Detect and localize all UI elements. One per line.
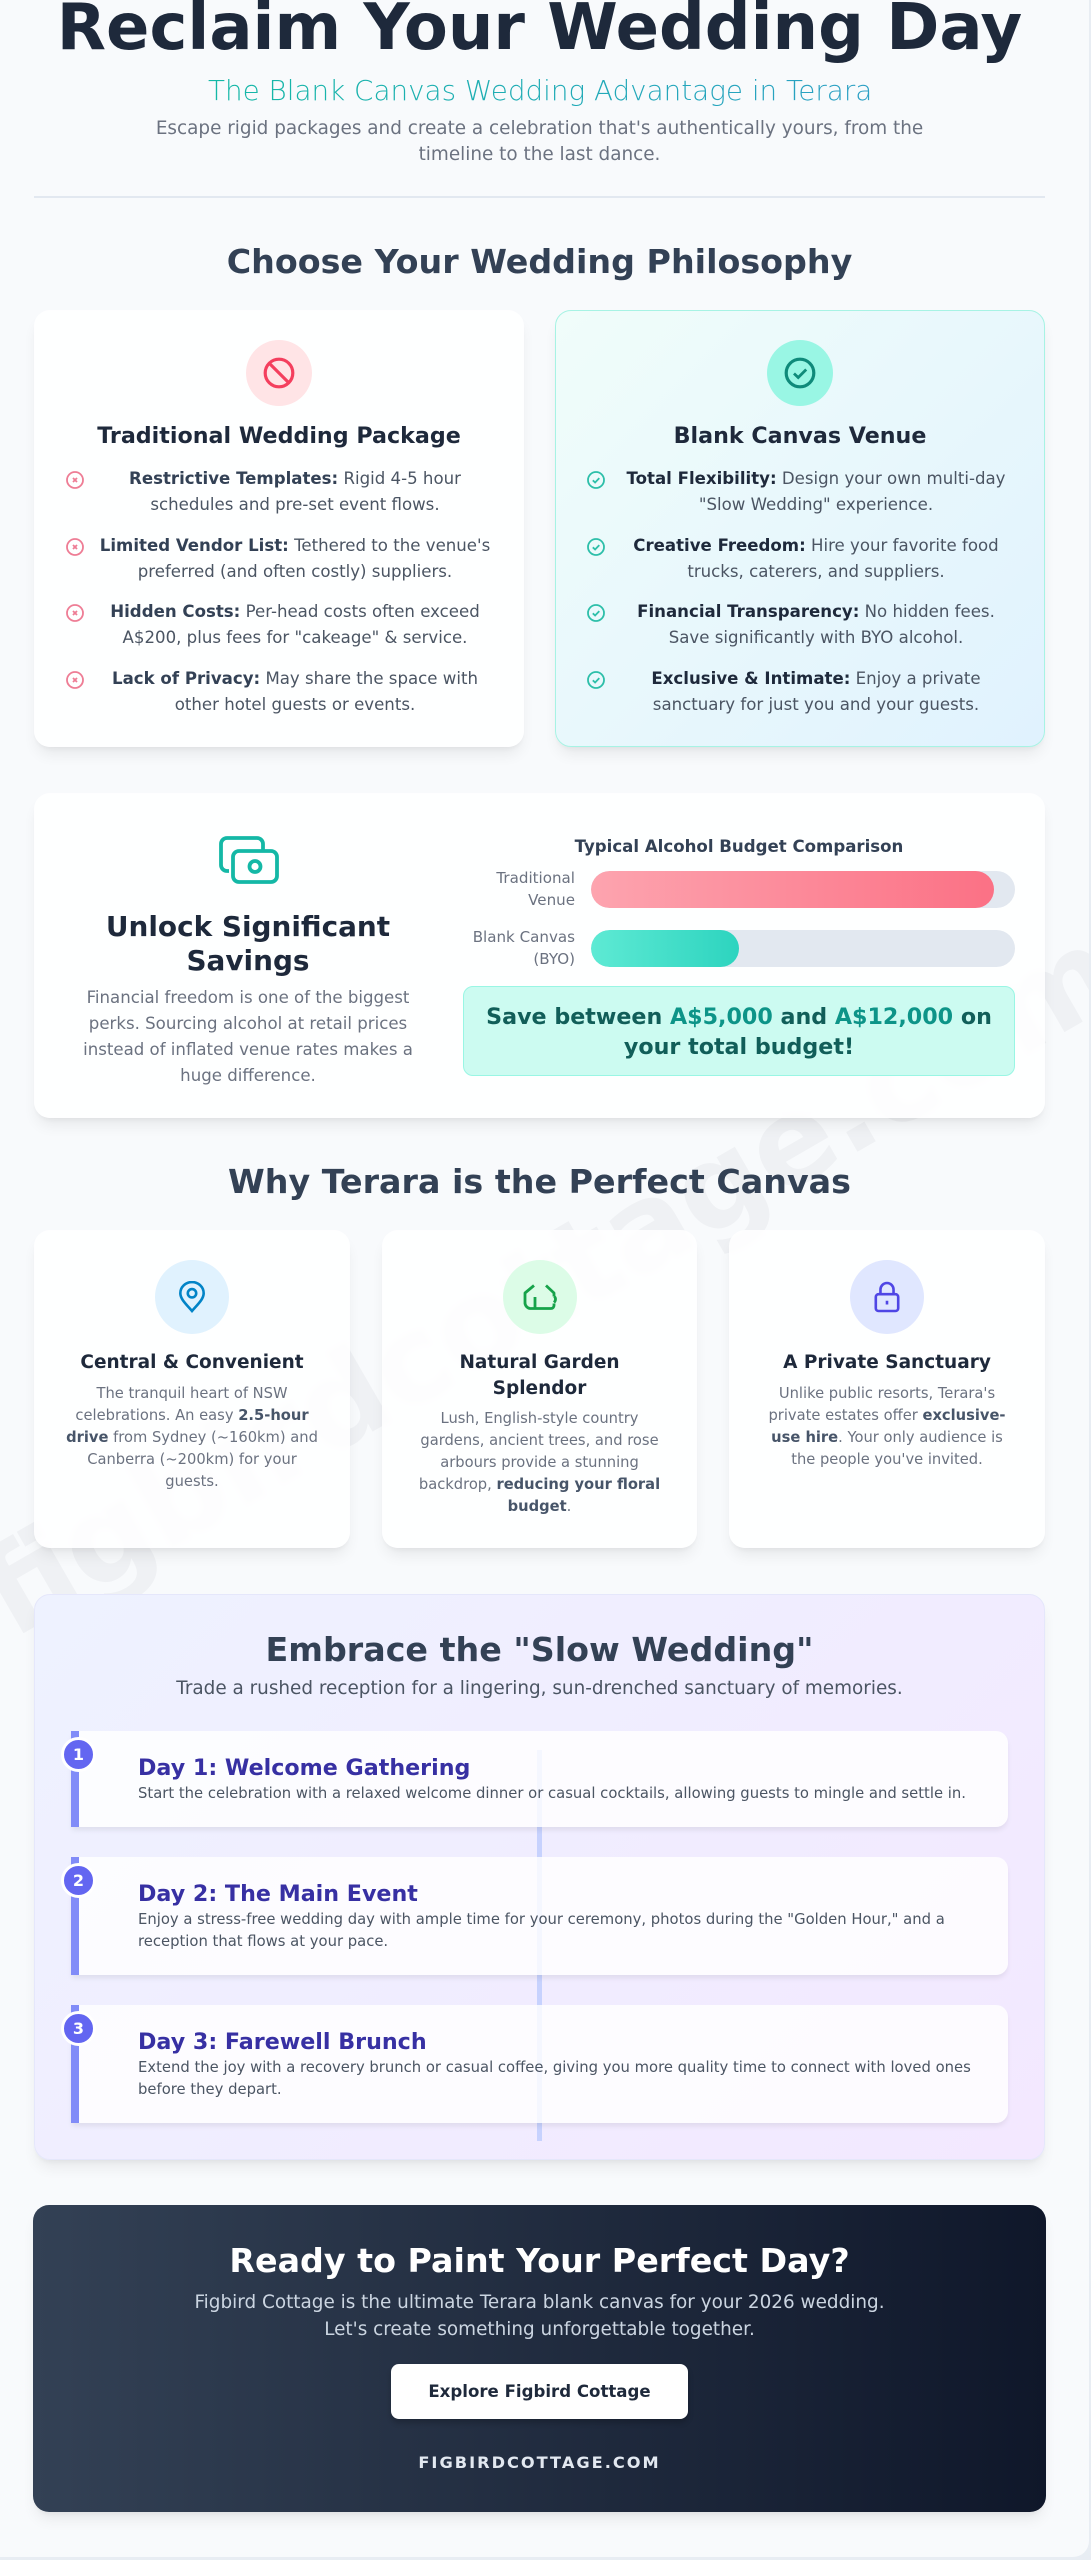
panel: call to action (33, 2205, 1046, 2512)
panel: central and convenient (34, 1230, 350, 1548)
cta heading: Ready to Paint Your Perfect Day? (229, 2241, 850, 2280)
intro text: Escape rigid packages and create a celebration that's authentically yours, from the (156, 118, 923, 139)
day 3 text: Extend the joy with a recovery brunch or casual coffee, giving you more quality time to connect with loved ones (138, 2059, 971, 2076)
text: arbours provide a stunning (440, 1454, 639, 1471)
badge 2: 2 (73, 1871, 84, 1890)
button (391, 2364, 688, 2419)
heading (459, 1352, 620, 1399)
day 1 (71, 1731, 1008, 1827)
heading: why terara: Why Terara is the Perfect Canvas (228, 1162, 851, 1201)
panel: slow wedding (34, 1594, 1045, 2160)
day 1 title: Day 1: Welcome Gathering (138, 1755, 470, 1781)
savings text (83, 988, 413, 1085)
button: Explore Figbird Cottage (428, 2382, 651, 2401)
heading: savings (106, 910, 390, 977)
cta text: Figbird Cottage is the ultimate Terara blank canvas for your 2026 wedding. (194, 2292, 885, 2313)
badge 2 (61, 1863, 96, 1898)
day 3 text (138, 2059, 971, 2098)
badge 3 (61, 2011, 96, 2046)
item: financial transparency (587, 602, 995, 647)
item: limited vendor list: Limited Vendor List: Tethered to the venue's (100, 536, 490, 555)
text: use hire. Your only audience is (771, 1429, 1003, 1446)
icon: cash (219, 836, 279, 884)
item: restrictive templates: schedules and pre-set event flows. (150, 495, 440, 514)
day 3 (71, 2005, 1008, 2123)
heading: Splendor (493, 1378, 586, 1399)
icon: check circle (767, 340, 833, 406)
bar: traditional (591, 871, 1015, 908)
item: creative freedom: Creative Freedom: Hire your favorite food (633, 536, 999, 555)
slow wedding text: Trade a rushed reception for a lingering, sun-drenched sanctuary of memories. (176, 1678, 903, 1699)
chart label: traditional (496, 869, 575, 909)
item: hidden costs: Hidden Costs: Per-head costs often exceed (110, 602, 480, 621)
text: Unlike public resorts, Terara's (779, 1385, 995, 1402)
chart label: byo: (BYO) (533, 950, 575, 968)
chart label: traditional: Venue (528, 891, 575, 909)
text: Lush, English-style country (441, 1410, 638, 1427)
badge 3: 3 (73, 2019, 84, 2038)
text (768, 1385, 1006, 1468)
text: drive from Sydney (~160km) and (66, 1429, 318, 1446)
item: exclusive and intimate: Exclusive & Intimate: Enjoy a private (651, 669, 981, 688)
text (66, 1385, 318, 1490)
item: lack of privacy (66, 669, 478, 714)
item: financial transparency: Save significantly with BYO alcohol. (669, 628, 963, 647)
item: financial transparency: Financial Transparency: No hidden fees. (637, 602, 995, 621)
day 3 title: Day 3: Farewell Brunch (138, 2029, 427, 2055)
item: creative freedom (587, 536, 999, 581)
item: exclusive and intimate (587, 669, 981, 714)
item: total flexibility: Total Flexibility: Design your own multi-day (626, 469, 1005, 488)
heading: A Private Sanctuary (783, 1352, 991, 1373)
text: the people you've invited. (791, 1451, 983, 1468)
day 2 text (138, 1911, 945, 1950)
savings text: Financial freedom is one of the biggest (87, 988, 409, 1007)
text: budget. (508, 1498, 571, 1515)
website: FIGBIRDCOTTAGE.COM (418, 2453, 661, 2472)
panel: savings (34, 793, 1045, 1118)
item: restrictive templates: Restrictive Templates: Rigid 4-5 hour (129, 469, 461, 488)
item: restrictive templates (66, 469, 461, 514)
icon: map pin (155, 1260, 229, 1334)
callout: savings range: your total budget! (624, 1034, 854, 1060)
heading: savings: Unlock Significant (106, 910, 390, 943)
bar: byo (591, 930, 1015, 967)
text: Canberra (~200km) for your (87, 1451, 297, 1468)
panel: traditional package (34, 310, 524, 747)
item: creative freedom: trucks, caterers, and suppliers. (687, 562, 945, 581)
day 2 title: Day 2: The Main Event (138, 1881, 418, 1907)
text: guests. (165, 1473, 219, 1490)
panel: private sanctuary (729, 1230, 1045, 1548)
day 2 text: Enjoy a stress-free wedding day with ample time for your ceremony, photos during the "Golden Hour," and a (138, 1911, 945, 1928)
item: limited vendor list: preferred (and often costly) suppliers. (138, 562, 452, 581)
subtitle: The Blank Canvas Wedding Advantage in Terara (208, 74, 872, 107)
chart label: traditional: Traditional (496, 869, 575, 887)
day 3 text: before they depart. (138, 2081, 282, 2098)
item: limited vendor list (66, 536, 490, 581)
heading: Central & Convenient (80, 1352, 304, 1373)
chart label: byo (473, 928, 575, 968)
intro text: timeline to the last dance. (419, 144, 660, 165)
text: backdrop, reducing your floral (419, 1476, 660, 1493)
text: celebrations. An easy 2.5-hour (75, 1407, 309, 1424)
text (419, 1410, 660, 1515)
item: lack of privacy: Lack of Privacy: May share the space with (112, 669, 478, 688)
cta text (194, 2292, 885, 2340)
heading: philosophy: Choose Your Wedding Philosophy (227, 242, 852, 281)
callout: savings range (463, 986, 1015, 1076)
savings text: instead of inflated venue rates makes a (83, 1040, 413, 1059)
cta text: Let's create something unforgettable together. (324, 2318, 755, 2340)
item: hidden costs: A$200, plus fees for "cakeage" & service. (123, 628, 467, 647)
chart title: Typical Alcohol Budget Comparison (575, 837, 903, 856)
text: The tranquil heart of NSW (96, 1385, 288, 1402)
item: total flexibility: "Slow Wedding" experience. (699, 495, 933, 514)
heading: slow wedding: Embrace the "Slow Wedding" (266, 1630, 813, 1669)
text: gardens, ancient trees, and rose (420, 1432, 659, 1449)
icon: lock (850, 1260, 924, 1334)
callout: savings range: Save between A$5,000 and A$12,000 on (486, 1004, 992, 1030)
day 2 text: reception that flows at your pace. (138, 1933, 388, 1950)
day 2 (71, 1857, 1008, 1975)
intro text (156, 118, 923, 165)
heading: traditional: Traditional Wedding Package (97, 423, 461, 449)
item: hidden costs (66, 602, 480, 647)
text: private estates offer exclusive- (768, 1407, 1006, 1424)
panel: natural garden splendor (382, 1230, 697, 1548)
savings text: huge difference. (180, 1066, 316, 1085)
icon: garden (503, 1260, 577, 1334)
badge 1: 1 (73, 1745, 84, 1764)
savings text: perks. Sourcing alcohol at retail prices (89, 1014, 407, 1033)
panel: blank canvas venue (555, 310, 1045, 747)
heading: blank canvas: Blank Canvas Venue (674, 423, 926, 449)
item: total flexibility (587, 469, 1005, 514)
day 1 text: Start the celebration with a relaxed welcome dinner or casual cocktails, allowing guests to mingle and settle in. (138, 1785, 966, 1802)
item: exclusive and intimate: sanctuary for just you and your guests. (653, 695, 979, 714)
chart label: byo: Blank Canvas (473, 928, 575, 946)
heading: savings: Savings (186, 944, 310, 977)
icon: ban (246, 340, 312, 406)
badge 1 (61, 1737, 96, 1772)
item: lack of privacy: other hotel guests or events. (175, 695, 415, 714)
heading: Natural Garden (459, 1352, 620, 1373)
